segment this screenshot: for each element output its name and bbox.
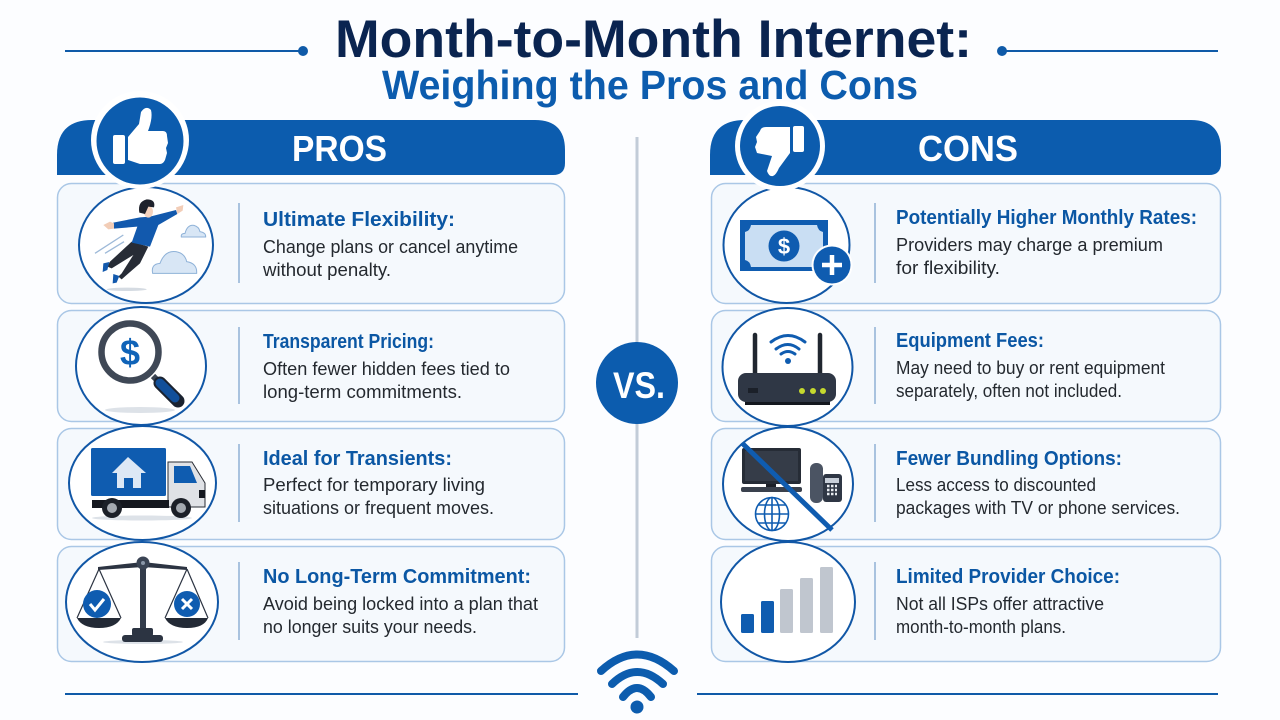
con card: providers: month-to-month plans. xyxy=(896,617,1066,637)
con card: rates: for flexibility. xyxy=(896,258,1000,278)
pro card: transients: Ideal for Transients: xyxy=(263,448,452,470)
icon: router xyxy=(738,335,836,405)
icon: wifi xyxy=(601,654,674,714)
cons heading: CONS xyxy=(918,128,1018,169)
con card: bundling: Fewer Bundling Options: xyxy=(896,448,1122,470)
icon: thumbs down xyxy=(735,101,825,191)
con card: bundling xyxy=(712,427,1220,541)
pro card: flexibility: Ultimate Flexibility: xyxy=(263,209,455,231)
pro card: flexibility: without penalty. xyxy=(262,260,391,280)
pro card: flexibility: Change plans or cancel anytime xyxy=(263,237,518,257)
title xyxy=(335,10,972,108)
pros header bar xyxy=(57,120,565,175)
title rule right xyxy=(997,46,1218,56)
icon: magnifier xyxy=(102,324,178,413)
pro card: pricing: Transparent Pricing: xyxy=(263,331,434,353)
con card: bundling: Less access to discounted xyxy=(896,475,1096,495)
VS badge: VS. xyxy=(613,365,665,406)
title: Weighing the Pros and Cons xyxy=(382,62,918,108)
con card: equipment xyxy=(712,308,1220,426)
con card: bundling: packages with TV or phone services. xyxy=(896,498,1180,518)
title rule left xyxy=(65,46,308,56)
pro card: pricing: Often fewer hidden fees tied to xyxy=(263,359,510,379)
centre divider xyxy=(636,137,638,638)
pro card: no commitment xyxy=(58,542,564,662)
pro card: no commitment: No Long-Term Commitment: xyxy=(263,566,531,588)
pro card: transients: situations or frequent moves. xyxy=(263,498,494,518)
pro card: transients: Perfect for temporary living xyxy=(263,475,485,495)
pro card: transients xyxy=(58,426,564,540)
icon: flying person xyxy=(95,199,206,291)
icon: banknote with plus: $ xyxy=(778,234,790,259)
pro card: flexibility xyxy=(58,184,564,304)
con card: equipment: Equipment Fees: xyxy=(896,330,1044,352)
pro card: pricing xyxy=(58,307,564,425)
title: Month-to-Month Internet: xyxy=(335,10,972,69)
con card: equipment: separately, often not included. xyxy=(896,381,1122,401)
pro card: no commitment: Avoid being locked into a plan that xyxy=(263,594,538,614)
panel: pros xyxy=(57,91,565,662)
icon: magnifier: $ xyxy=(120,332,140,373)
icon: moving truck xyxy=(91,448,205,520)
VS badge xyxy=(596,342,678,424)
con card: rates: Providers may charge a premium xyxy=(896,235,1163,255)
cons header bar xyxy=(710,120,1221,175)
pros heading: PROS xyxy=(292,128,387,169)
icon: thumbs up xyxy=(91,91,189,189)
con card: providers: Limited Provider Choice: xyxy=(896,566,1120,588)
pro card: pricing: long-term commitments. xyxy=(263,382,462,402)
con card: rates: Potentially Higher Monthly Rates: xyxy=(896,207,1197,229)
icon: signal bars xyxy=(741,567,833,633)
con card: providers xyxy=(712,542,1220,662)
icon: banknote with plus xyxy=(740,220,852,286)
con card: rates xyxy=(712,184,1220,304)
con card: equipment: May need to buy or rent equipment xyxy=(896,358,1165,378)
icon: balance scale xyxy=(77,556,208,644)
footer rules xyxy=(65,693,1218,695)
pro card: no commitment: no longer suits your needs. xyxy=(263,617,477,637)
con card: providers: Not all ISPs offer attractive xyxy=(896,594,1104,614)
icon: crossed out TV, phone and globe xyxy=(741,443,842,530)
panel: cons xyxy=(710,101,1221,662)
